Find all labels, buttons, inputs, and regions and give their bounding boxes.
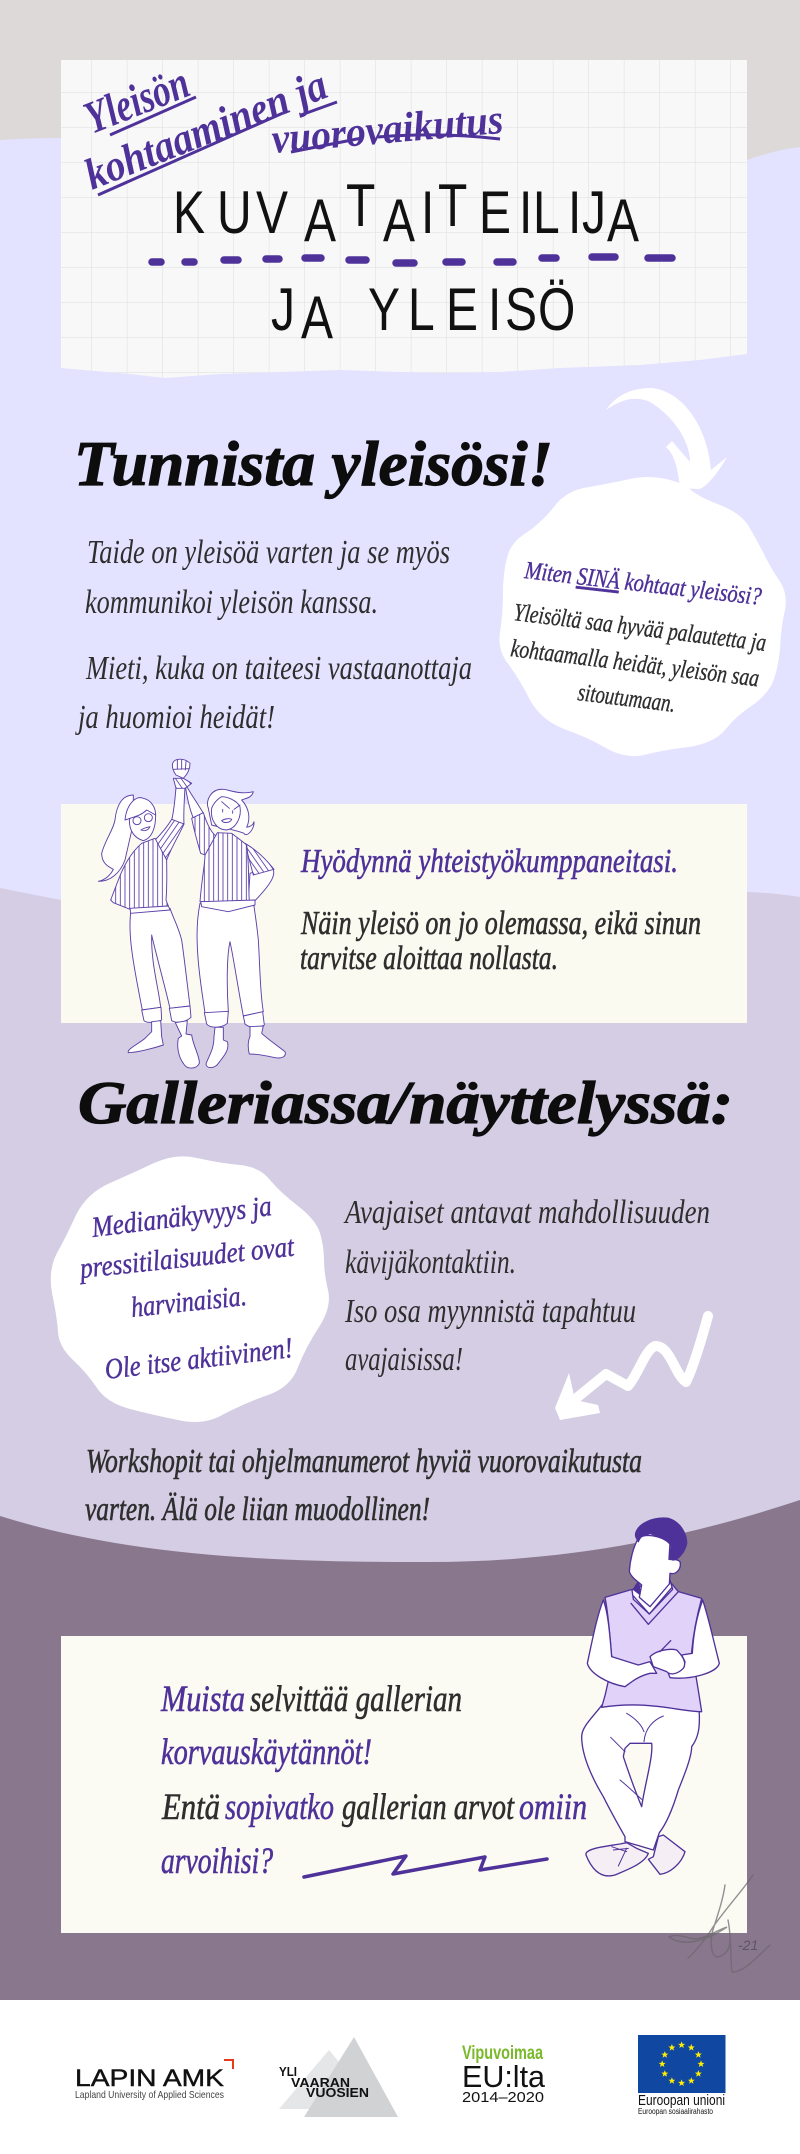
panel: white bubble with question: sitoutumaan. bbox=[576, 679, 677, 718]
arrow: curved white arrow to bubble bbox=[606, 388, 727, 489]
text block: workshops bbox=[85, 1443, 642, 1528]
woman right: facial features bbox=[222, 802, 240, 823]
woman left: cuffs bbox=[142, 1006, 191, 1022]
background: mauve section bbox=[0, 1500, 800, 2000]
panel: white bubble about media: Ole itse aktiivinen! bbox=[103, 1332, 295, 1386]
woman left: hair bbox=[98, 795, 133, 881]
panel: white bubble about media: Medianäkyvyys ja bbox=[89, 1190, 274, 1244]
zigzag purple underline bbox=[304, 1856, 547, 1877]
woman right: hip arm bbox=[248, 867, 274, 901]
text block: partners: tarvitse aloittaa nollasta. bbox=[300, 940, 558, 977]
heading: Galleriassa/näyttelyssä:: Galleriassa/näyttelyssä: bbox=[78, 1070, 733, 1136]
text block: workshops: varten. Älä ole liian muodollinen! bbox=[85, 1491, 430, 1528]
woman right: sleeve bbox=[192, 813, 217, 855]
logo: Yli vaaran vuosien: YLI bbox=[279, 2065, 297, 2079]
man: hair bbox=[636, 1518, 687, 1560]
raised wrist cuff bbox=[173, 778, 192, 788]
panel: white bubble with question bbox=[499, 477, 786, 756]
text block: opening night: avajaisissa! bbox=[345, 1341, 463, 1378]
man: gap between legs bbox=[623, 1743, 652, 1807]
title: KUVATAITEILIJA: KUVATAITEILIJA bbox=[173, 172, 640, 254]
illustration: two women raising hands bbox=[98, 759, 285, 1068]
panel: white bubble about media: harvinaisia. bbox=[129, 1280, 248, 1324]
text block: reminder: sopivatko bbox=[225, 1787, 334, 1828]
signature: -21 bbox=[738, 1937, 758, 1953]
background: lilac section bbox=[0, 869, 800, 1600]
logo: Lapin AMK: Lapland University of Applied Sciences bbox=[75, 2089, 224, 2101]
woman right: shoes bbox=[206, 1026, 285, 1068]
illustration: seated man legs bbox=[582, 1703, 699, 1876]
panel: torn grid paper title sheet bbox=[61, 60, 747, 378]
woman left: fringe bbox=[125, 798, 156, 820]
panel: white bubble with question: Miten SINÄ kohtaat yleisösi? bbox=[523, 557, 763, 611]
woman right: sleeve bbox=[245, 843, 274, 875]
woman left: trousers bbox=[130, 908, 190, 1010]
logo: Vipuvoimaa EU:lta bbox=[462, 2043, 546, 2106]
man: left arm bbox=[587, 1600, 657, 1687]
text block: reminder bbox=[160, 1679, 587, 1882]
text block: reminder: selvittää gallerian bbox=[250, 1679, 462, 1720]
text block: opening night bbox=[343, 1194, 710, 1378]
raised fists bbox=[172, 759, 190, 778]
woman right: raised arm bbox=[185, 783, 203, 818]
illustration: seated man upper body bbox=[587, 1518, 719, 1712]
heading: Tunnista yleisösi!: Tunnista yleisösi! bbox=[74, 428, 553, 499]
panel: partners cream card bbox=[61, 804, 747, 1023]
man: right arm bbox=[668, 1600, 719, 1678]
woman left: belt bbox=[130, 906, 170, 913]
title: JA YLEISÖ: JA YLEISÖ bbox=[271, 276, 575, 351]
text block: intro: ja huomioi heidät! bbox=[75, 699, 275, 736]
woman left: shoes bbox=[128, 1021, 199, 1068]
logo: Lapin AMK: LAPIN AMK bbox=[75, 2065, 224, 2092]
panel: white bubble about media bbox=[51, 1156, 329, 1422]
man: trouser folds bbox=[611, 1713, 663, 1799]
man: hand and pen bbox=[650, 1641, 685, 1674]
man: vest bbox=[602, 1582, 702, 1712]
panel: reminder cream card bbox=[61, 1636, 747, 1933]
woman right: hair back bbox=[207, 789, 254, 835]
woman right: trousers bbox=[197, 902, 263, 1016]
text block: reminder: korvauskäytännöt! bbox=[161, 1732, 372, 1773]
logo: Vipuvoimaa EU:lta: 2014–2020 bbox=[462, 2089, 544, 2106]
text block: reminder: gallerian arvot bbox=[342, 1787, 515, 1828]
background: grey top band bbox=[0, 0, 800, 400]
logo: Yli vaaran vuosien: VUOSIEN bbox=[306, 2086, 369, 2100]
dashed purple divider bbox=[152, 257, 672, 263]
man: left shoe bbox=[586, 1843, 648, 1876]
text block: opening night: Iso osa myynnistä tapahtuu bbox=[344, 1293, 636, 1330]
text block: reminder: Entä bbox=[161, 1787, 220, 1828]
man: trousers bbox=[582, 1703, 699, 1850]
logo: European Union flag bbox=[638, 2035, 726, 2116]
man: shirt collar bbox=[632, 1578, 673, 1614]
background: white footer band bbox=[0, 2000, 800, 2154]
man: vest neckline bbox=[631, 1587, 678, 1624]
woman left: glasses and mouth bbox=[133, 814, 152, 831]
woman left: sleeve bbox=[155, 819, 184, 860]
logo: European Union flag: Euroopan unioni bbox=[638, 2093, 725, 2109]
woman right: cuffs bbox=[204, 1011, 264, 1027]
woman left: torso bbox=[111, 838, 168, 909]
arrow: zigzag white arrow bbox=[555, 1316, 708, 1420]
logo: European Union flag: Euroopan sosiaalirahasto bbox=[638, 2107, 713, 2116]
woman right: torso bbox=[200, 833, 249, 902]
logo: Yli vaaran vuosien bbox=[279, 2037, 398, 2117]
logo: Vipuvoimaa EU:lta: Vipuvoimaa bbox=[462, 2043, 543, 2064]
signature bbox=[669, 1875, 770, 1972]
background: lavender section bbox=[0, 138, 800, 1000]
man: shoelaces bbox=[612, 1847, 628, 1866]
text block: intro: Mieti, kuka on taiteesi vastaanottaja bbox=[85, 650, 472, 687]
text block: opening night: kävijäkontaktiin. bbox=[345, 1244, 516, 1281]
logo: Lapin AMK bbox=[75, 2060, 233, 2101]
panel: white bubble about media: pressitilaisuudet ovat bbox=[77, 1231, 296, 1285]
text block: intro: kommunikoi yleisön kanssa. bbox=[85, 584, 378, 621]
women legs bbox=[128, 900, 285, 1068]
subtitle: vuorovaikutus: vuorovaikutus bbox=[270, 97, 505, 163]
woman right: belt bbox=[201, 900, 255, 912]
subtitle: Yleisön: Yleisön bbox=[77, 56, 196, 143]
woman left: head bbox=[129, 808, 156, 841]
man: right shoe bbox=[648, 1835, 685, 1874]
woman left: raised arm bbox=[172, 787, 185, 824]
man: neck shadow bbox=[633, 1582, 641, 1595]
text block: reminder: Muista bbox=[160, 1679, 245, 1720]
text block: reminder: arvoihisi? bbox=[161, 1841, 273, 1882]
text block: intro: Taide on yleisöä varten ja se myös bbox=[87, 534, 450, 571]
subtitle: kohtaaminen ja: kohtaaminen ja bbox=[78, 60, 334, 199]
man: neck and face bbox=[629, 1536, 680, 1607]
text block: partners: Hyödynnä yhteistyökumppaneitasi. bbox=[300, 843, 678, 880]
text block: intro bbox=[75, 534, 472, 736]
logo: Vipuvoimaa EU:lta: EU:lta bbox=[462, 2059, 546, 2094]
text block: partners bbox=[300, 843, 701, 977]
logo: Yli vaaran vuosien: VAARAN bbox=[291, 2076, 350, 2090]
text block: opening night: Avajaiset antavat mahdollisuuden bbox=[343, 1194, 710, 1231]
woman right: face bbox=[211, 797, 240, 830]
text block: reminder: omiin bbox=[519, 1787, 587, 1828]
